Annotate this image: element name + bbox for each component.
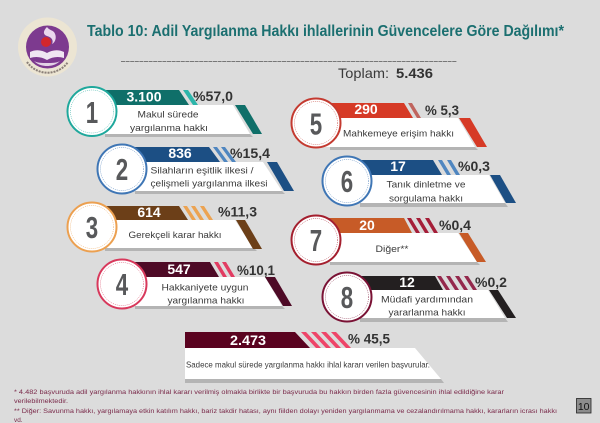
panel: item 4: Hakkaniyete uygun bbox=[162, 282, 248, 294]
panel: item 8: yararlanma hakkı bbox=[388, 308, 466, 318]
divider line under title bbox=[121, 60, 457, 62]
panel: item 6: 17 bbox=[390, 158, 406, 174]
total: Toplam: bbox=[338, 65, 389, 81]
panel: summary bar bbox=[185, 330, 444, 383]
panel: item 4 bbox=[98, 260, 292, 309]
panel: item 2: çelişmeli yargılanma ilkesi bbox=[150, 178, 268, 190]
panel: item 5: Mahkemeye erişim hakkı bbox=[343, 128, 454, 140]
panel: item 3: 614 bbox=[137, 204, 161, 220]
panel: item 6: 6 bbox=[341, 164, 353, 199]
panel: item 4: 4 bbox=[116, 267, 128, 302]
page number bbox=[576, 398, 591, 413]
panel: item 5: % 5,3 bbox=[425, 102, 459, 118]
panel: item 8: 12 bbox=[399, 274, 415, 290]
footnotes: * 4.482 başvuruda adil yargılanma hakkının ihlal kararı verilmiş olmakla birlikte bir başvuruda bu hakkın birden fazla güvencesinin ihlal edildiğine karar bbox=[14, 389, 505, 396]
footnotes bbox=[14, 389, 557, 423]
panel: item 1 bbox=[68, 87, 262, 137]
footnotes: ** Diğer: Savunma hakkı, yargılamaya etkin katılım hakkı, bariz takdir hatası, aynı fiilden dolayı yeniden yargılanmama ve cezalandırılmama hakkı, kararların icrası hakkı bbox=[14, 408, 557, 415]
total bbox=[338, 65, 433, 81]
panel: item 8 bbox=[322, 272, 516, 322]
panel: item 7: %0,4 bbox=[439, 217, 471, 233]
total: 5.436 bbox=[396, 65, 433, 81]
panel: item 1: yargılanma hakkı bbox=[130, 123, 208, 134]
panel: item 4: %10,1 bbox=[237, 262, 275, 278]
panel: item 2: 836 bbox=[168, 145, 192, 161]
title: Tablo 10: Adil Yargılanma Hakkı ihlallerinin Güvencelere Göre Dağılımı* bbox=[87, 23, 565, 40]
panel: summary bar: % 45,5 bbox=[348, 330, 390, 346]
panel: item 3: %11,3 bbox=[218, 204, 257, 220]
panel: item 7: Diğer** bbox=[376, 244, 409, 255]
panel: summary bar: 2.473 bbox=[230, 332, 266, 348]
panel: item 4: yargılanma hakkı bbox=[168, 296, 244, 306]
panel: summary bar: Sadece makul sürede yargılanma hakkı ihlal kararı verilen başvurular. bbox=[186, 360, 430, 370]
panel: item 1: 1 bbox=[86, 95, 98, 130]
panel: item 5: 290 bbox=[354, 101, 378, 117]
footnotes: verilebilmektedir. bbox=[14, 398, 68, 405]
panel: item 7: 7 bbox=[310, 223, 322, 258]
panel: item 5 bbox=[292, 98, 487, 150]
panel: item 8: Müdafi yardımından bbox=[381, 294, 473, 306]
panel: item 7: 20 bbox=[359, 217, 375, 233]
page number: 10 bbox=[578, 401, 590, 413]
panel: item 3: 3 bbox=[86, 210, 98, 245]
panel: item 2: 2 bbox=[116, 152, 128, 187]
panel: item 6 bbox=[322, 156, 516, 207]
panel: item 6: %0,3 bbox=[458, 158, 490, 174]
panel: item 2: %15,4 bbox=[230, 145, 270, 161]
panel: item 1: Makul sürede bbox=[138, 110, 198, 120]
icon: institution logo bbox=[18, 18, 77, 76]
panel: item 5: 5 bbox=[310, 107, 322, 141]
panel: item 4: 547 bbox=[167, 261, 191, 277]
panel: item 6: Tanık dinletme ve bbox=[386, 180, 466, 190]
panel: item 2: Silahların eşitlik ilkesi / bbox=[150, 166, 254, 176]
panel: item 8: %0,2 bbox=[475, 274, 507, 290]
panel: item 6: sorgulama hakkı bbox=[389, 194, 463, 204]
panel: item 1: %57,0 bbox=[193, 88, 233, 104]
panel: item 7 bbox=[292, 216, 486, 265]
panel: item 3: Gerekçeli karar hakkı bbox=[128, 230, 222, 241]
panel: item 8: 8 bbox=[341, 280, 353, 315]
panel: item 1: 3.100 bbox=[126, 88, 162, 104]
panel: item 2 bbox=[98, 144, 294, 194]
panel: item 3 bbox=[68, 202, 262, 252]
